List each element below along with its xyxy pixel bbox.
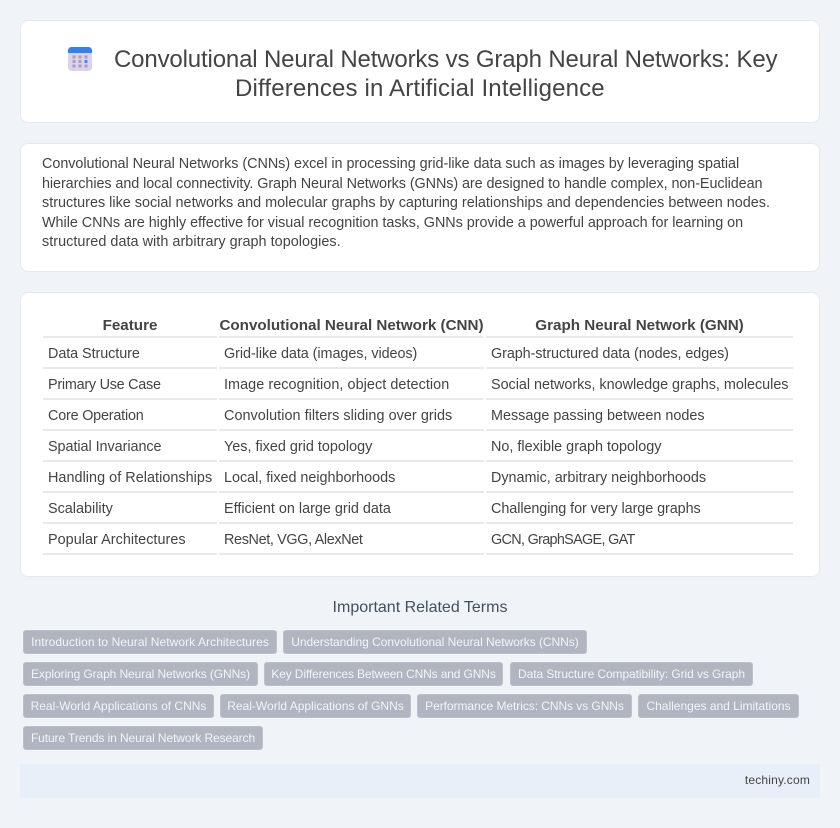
- row: Data Structure: Graph-structured data (nodes, edges): [491, 346, 729, 362]
- row: Core Operation: Core Operation: [48, 408, 144, 424]
- row: Spatial Invariance: No, flexible graph topology: [491, 439, 661, 455]
- tag: [23, 630, 277, 654]
- tag: Challenges and Limitations: [646, 699, 791, 713]
- intro paragraph: [42, 156, 770, 250]
- tag: [417, 694, 632, 718]
- intro paragraph: Convolutional Neural Networks (CNNs) excel in processing grid-like data such as images by leveraging spatial: [42, 156, 739, 172]
- row: Handling of Relationships: Dynamic, arbitrary neighborhoods: [491, 470, 706, 486]
- row: Scalability: [48, 501, 701, 517]
- row: Spatial Invariance: [48, 439, 662, 455]
- tag: [283, 630, 587, 654]
- table header: GNN: Graph Neural Network (GNN): [535, 317, 744, 334]
- tag: Data Structure Compatibility: Grid vs Graph: [518, 667, 745, 681]
- intro paragraph: structured data with arbitrary graph topologies.: [42, 234, 341, 250]
- row: Spatial Invariance: Yes, fixed grid topology: [224, 439, 372, 455]
- row: Scalability: Efficient on large grid data: [224, 501, 391, 517]
- intro paragraph: hierarchies and local connectivity. Graph Neural Networks (GNNs) are designed to handle complex, non-Euclidean: [42, 176, 762, 192]
- tag: Real-World Applications of GNNs: [227, 699, 404, 713]
- heading: related terms: Important Related Terms: [333, 599, 507, 616]
- tag: [510, 662, 753, 686]
- row: Scalability: Challenging for very large graphs: [491, 501, 701, 517]
- footer source: techiny.com: [745, 773, 810, 787]
- row: Core Operation: Message passing between nodes: [491, 408, 705, 424]
- row: Primary Use Case: Image recognition, object detection: [224, 377, 449, 393]
- panel: related term tags: [23, 630, 799, 750]
- row: Spatial Invariance: Spatial Invariance: [48, 439, 162, 455]
- tag: [23, 694, 214, 718]
- tag: Exploring Graph Neural Networks (GNNs): [31, 667, 250, 681]
- row: Primary Use Case: Primary Use Case: [48, 377, 161, 393]
- tag: Performance Metrics: CNNs vs GNNs: [425, 699, 624, 713]
- table header: Feature: Feature: [103, 317, 157, 334]
- tag: Introduction to Neural Network Architectures: [31, 635, 269, 649]
- row: Data Structure: [48, 346, 729, 362]
- tag: Key Differences Between CNNs and GNNs: [271, 667, 496, 681]
- title: Convolutional Neural Networks vs Graph Neural Networks: Key: [114, 46, 777, 73]
- footer: [20, 764, 820, 798]
- tag: [23, 726, 263, 750]
- row: Popular Architectures: Popular Architectures: [48, 532, 186, 548]
- row: Data Structure: Grid-like data (images, videos): [224, 346, 417, 362]
- row: Popular Architectures: GCN, GraphSAGE, GAT: [491, 532, 635, 548]
- intro paragraph: While CNNs are highly effective for visual recognition tasks, GNNs provide a powerful approach for learning on: [42, 214, 743, 230]
- icon: calendar grid: [68, 47, 92, 71]
- title: Differences in Artificial Intelligence: [235, 75, 605, 102]
- tag: Understanding Convolutional Neural Networks (CNNs): [291, 635, 579, 649]
- tag: [638, 694, 799, 718]
- row: Handling of Relationships: [48, 470, 706, 486]
- tag: [264, 662, 503, 686]
- intro paragraph: structures like social networks and molecular graphs by capturing relationships and dependencies between nodes.: [42, 195, 770, 211]
- title: [114, 46, 778, 102]
- panel: introduction text: [20, 143, 820, 272]
- tag: Real-World Applications of CNNs: [31, 699, 206, 713]
- row: Handling of Relationships: Local, fixed neighborhoods: [224, 470, 395, 486]
- panel: comparison table: [20, 292, 820, 577]
- row: Data Structure: Data Structure: [48, 346, 140, 362]
- table header: CNN: Convolutional Neural Network (CNN): [219, 317, 484, 334]
- tag: [220, 694, 411, 718]
- tag: [23, 662, 258, 686]
- panel: header: [20, 20, 820, 123]
- row: Popular Architectures: ResNet, VGG, AlexNet: [224, 532, 363, 548]
- row: Scalability: Scalability: [48, 501, 113, 517]
- row: Core Operation: [48, 408, 705, 424]
- row: Popular Architectures: [48, 532, 635, 548]
- row: Handling of Relationships: Handling of Relationships: [48, 470, 212, 486]
- tag: Future Trends in Neural Network Research: [31, 731, 255, 745]
- row: Core Operation: Convolution filters sliding over grids: [224, 408, 452, 424]
- row: Primary Use Case: Social networks, knowledge graphs, molecules: [491, 377, 788, 393]
- row: Primary Use Case: [48, 377, 788, 393]
